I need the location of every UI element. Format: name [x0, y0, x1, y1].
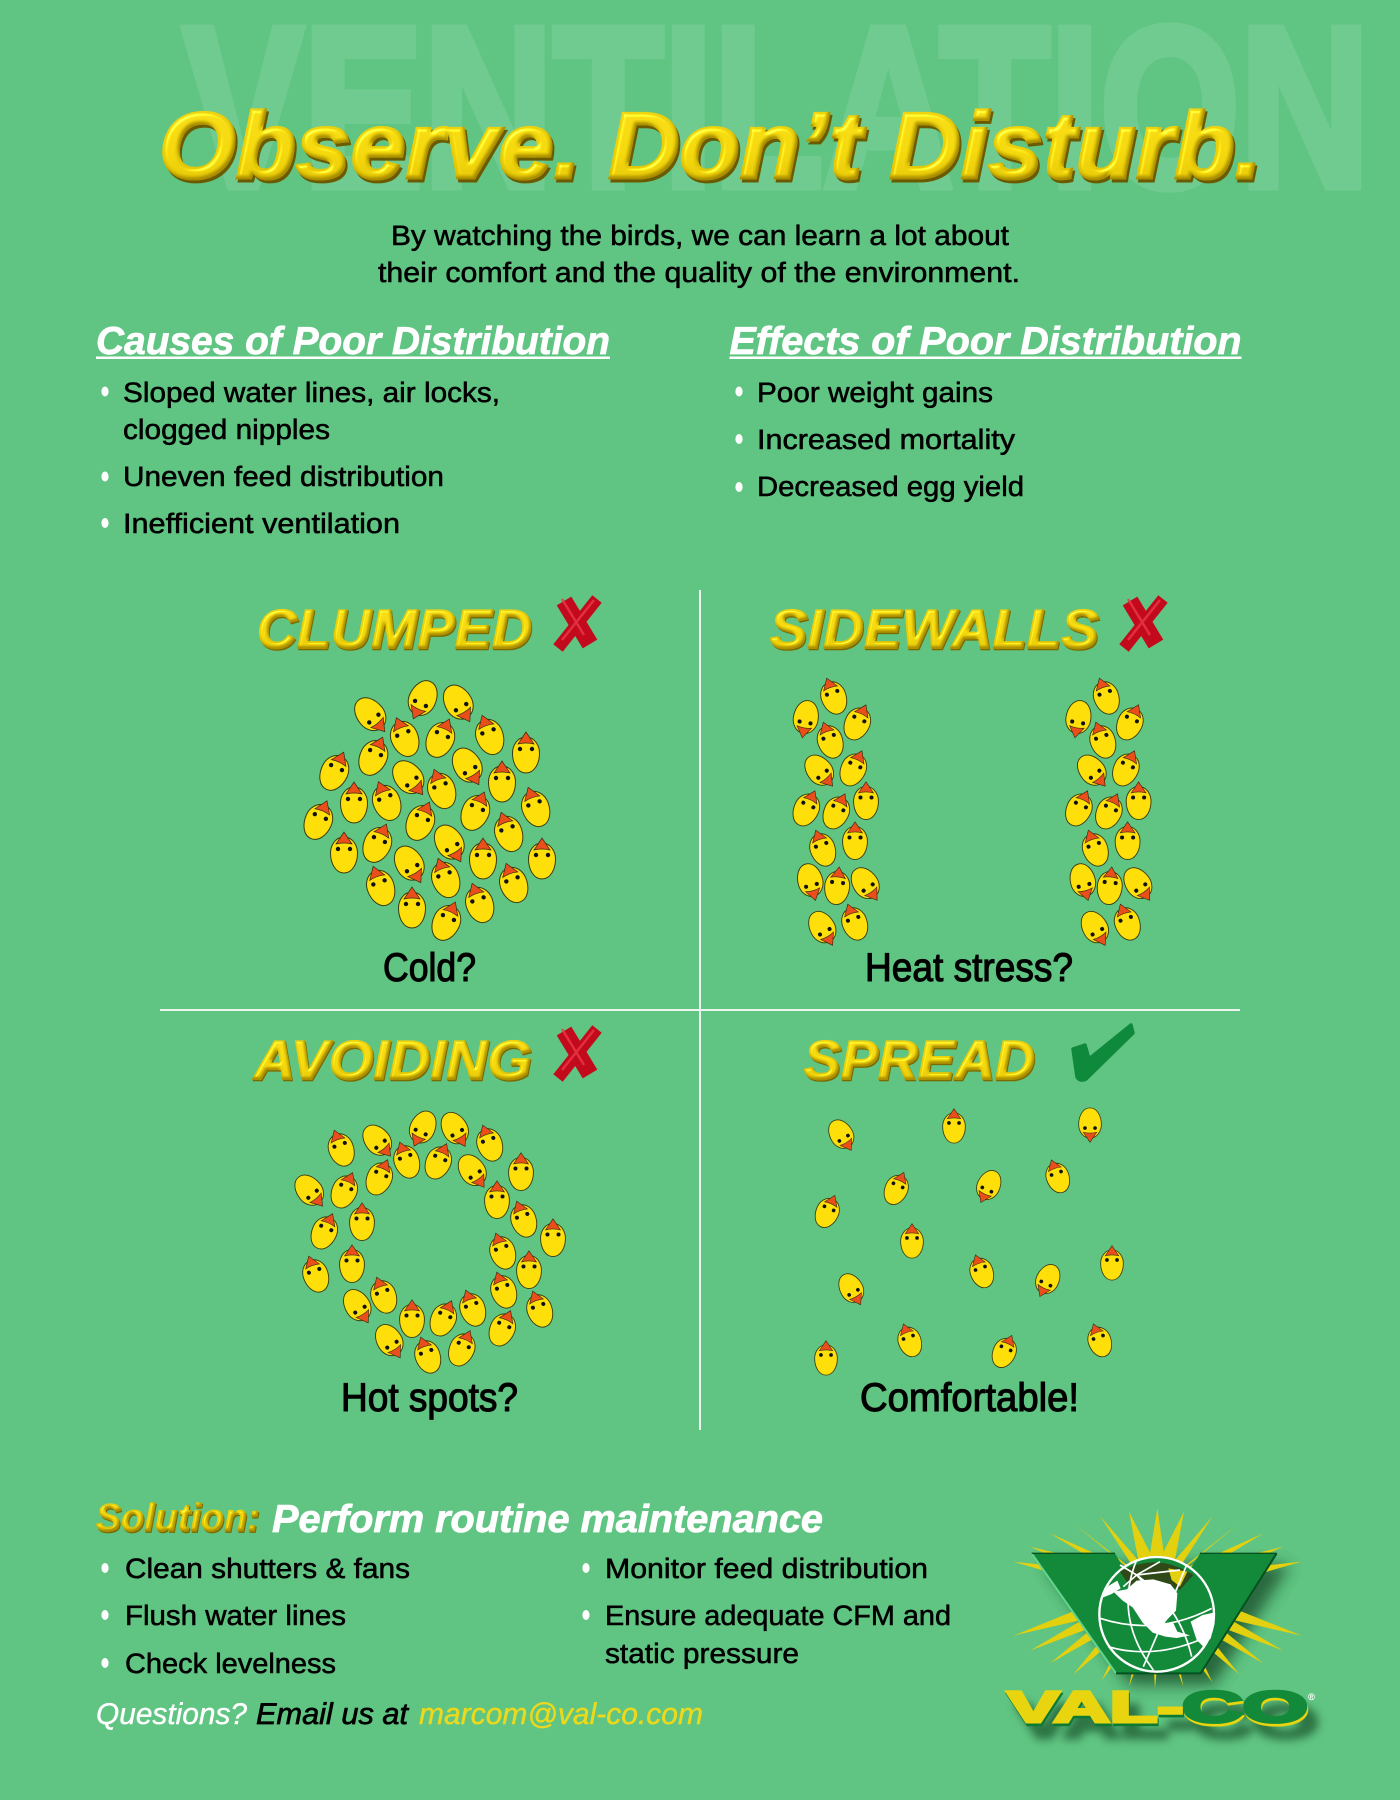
list: effects: Poor weight gains [757, 377, 993, 408]
list: causes: Uneven feed distribution [123, 461, 444, 492]
logo shadow [1045, 1565, 1290, 1685]
caption: Cold?: Cold? [383, 946, 476, 990]
logo V shape [1032, 1553, 1277, 1673]
heading: causes: Causes of Poor Distribution [96, 320, 610, 363]
caption: Hot spots?: Hot spots? [341, 1376, 518, 1420]
list: maintenance column one: Clean shutters & fans [125, 1553, 410, 1584]
panel: solution [96, 1497, 951, 1731]
chick flock: left wall [788, 674, 887, 952]
logo registered mark: ® [1308, 1692, 1315, 1702]
icon: red X [558, 599, 597, 648]
chick flock: right wall [1060, 674, 1160, 952]
caption: Heat stress?: Heat stress? [865, 946, 1073, 990]
panel: causes of poor distribution [96, 320, 610, 539]
list: maintenance column one: Flush water lines [125, 1600, 346, 1631]
list: maintenance column one: Check levelness [125, 1648, 336, 1679]
logo sunburst rays [1013, 1508, 1302, 1688]
intro text: their comfort and the quality of the environment. [378, 257, 1020, 288]
panel: spread [804, 1025, 1133, 1420]
list: maintenance column two: static pressure [605, 1638, 799, 1669]
caption: Comfortable!: Comfortable! [860, 1376, 1079, 1420]
icon: red X [1124, 599, 1163, 648]
contact line [96, 1698, 703, 1731]
chick flock: spread [810, 1108, 1123, 1375]
list: causes: clogged nipples [123, 414, 330, 445]
icon: green check [1073, 1025, 1133, 1080]
contact line: Email us at [256, 1698, 410, 1731]
list: causes: Inefficient ventilation [123, 508, 400, 539]
panel: sidewalls [770, 598, 1163, 990]
logo: VAL-CO [1007, 1508, 1315, 1731]
title: Observe. Don’t Disturb. [159, 93, 1262, 198]
list: effects: Increased mortality [757, 424, 1015, 455]
logo globe [1099, 1557, 1215, 1672]
list: maintenance column two [582, 1553, 951, 1669]
list: maintenance column one [101, 1553, 410, 1679]
list: causes: Sloped water lines, air locks, [123, 377, 500, 408]
heading: solution: Solution: [96, 1497, 260, 1540]
list: maintenance column two: Ensure adequate CFM and [605, 1600, 951, 1631]
intro text [378, 220, 1020, 288]
icon: red X [558, 1029, 597, 1078]
heading: SPREAD: SPREAD [804, 1029, 1035, 1091]
heading: solution: Perform routine maintenance [272, 1498, 823, 1541]
logo wordmark: VAL- [1007, 1682, 1183, 1731]
list: maintenance column two: Monitor feed distribution [605, 1553, 928, 1584]
list: causes [101, 377, 500, 539]
list: effects: Decreased egg yield [757, 471, 1024, 502]
chick flock: clumped [299, 676, 556, 945]
contact line: Questions? [96, 1698, 247, 1731]
contact line: marcom@val-co.com [419, 1698, 703, 1731]
list: effects [735, 377, 1024, 502]
logo wordmark: CO [1182, 1682, 1308, 1731]
heading: AVOIDING: AVOIDING [252, 1029, 532, 1091]
chick flock: avoiding ring [289, 1107, 565, 1377]
panel: clumped [257, 598, 597, 990]
heading: CLUMPED: CLUMPED [257, 598, 532, 660]
heading: SIDEWALLS: SIDEWALLS [770, 598, 1099, 660]
logo wordmark [1007, 1682, 1308, 1731]
panel: effects of poor distribution [730, 320, 1242, 502]
intro text: By watching the birds, we can learn a lot about [391, 220, 1009, 251]
panel: avoiding [252, 1029, 597, 1420]
heading: effects: Effects of Poor Distribution [730, 320, 1242, 363]
